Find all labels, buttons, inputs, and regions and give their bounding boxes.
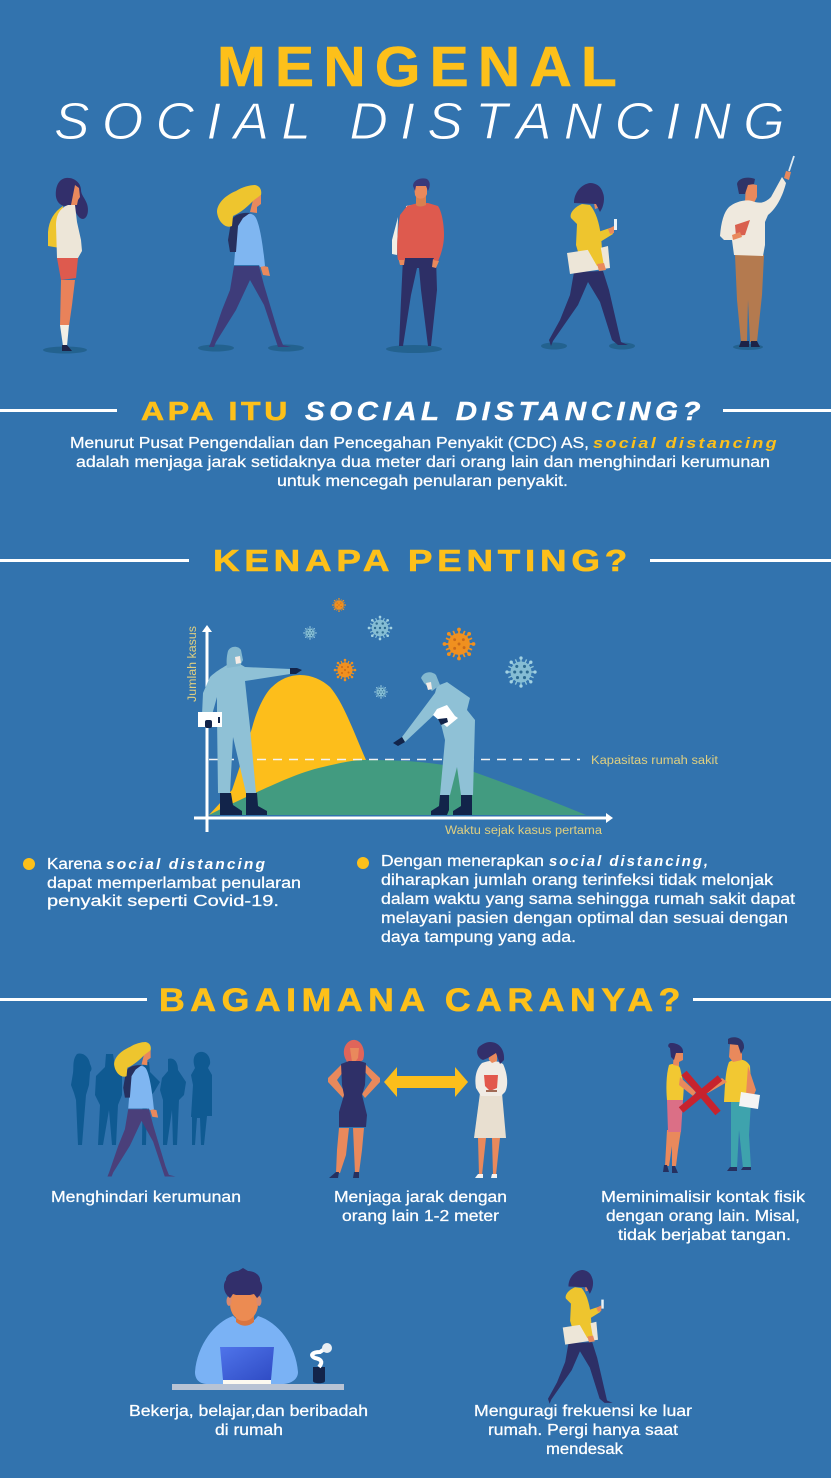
left bullet point: dapat memperlambat penularan bbox=[47, 875, 301, 892]
capacity label: Kapasitas rumah sakit bbox=[591, 755, 719, 767]
y-axis label: Jumlah kasus bbox=[187, 626, 199, 702]
definition text block bbox=[70, 435, 779, 490]
caption: Menjaga jarak dengan bbox=[334, 1189, 507, 1206]
person 4: woman with phone and paper bbox=[541, 183, 635, 350]
icon: red cross bbox=[681, 1073, 720, 1113]
way 3: minimize physical contact bbox=[601, 1037, 805, 1244]
icon: coffee cup with steam bbox=[312, 1343, 332, 1383]
left bullet point: Karena bbox=[47, 856, 102, 873]
person 3: man in red sweater bbox=[386, 178, 444, 353]
right bullet point: Dengan menerapkan bbox=[381, 853, 544, 870]
caption: tidak berjabat tangan. bbox=[618, 1227, 791, 1244]
section heading: bagaimana caranya bbox=[0, 982, 831, 1018]
doctor pointing at peak bbox=[198, 647, 302, 815]
caption: rumah. Pergi hanya saat bbox=[488, 1422, 679, 1439]
icon: person at laptop bbox=[195, 1268, 298, 1384]
right bullet point bbox=[357, 853, 796, 946]
caption: Bekerja, belajar,dan beribadah bbox=[129, 1403, 368, 1420]
chart axes bbox=[194, 625, 613, 832]
way 2: keep distance bbox=[328, 1040, 507, 1225]
green flattened curve bbox=[209, 760, 586, 815]
section heading: apa itu social distancing: SOCIAL DISTANCING? bbox=[305, 396, 705, 426]
title: SOCIAL DISTANCING bbox=[54, 93, 797, 151]
way 4: work from home bbox=[129, 1268, 368, 1439]
person 1: woman with backpack bbox=[43, 178, 88, 354]
icon: woman in cream dress bbox=[474, 1042, 507, 1178]
person 5: man pointing upward bbox=[720, 156, 794, 350]
icon: walking woman with paper bbox=[548, 1270, 613, 1404]
right bullet point: diharapkan jumlah orang terinfeksi tidak melonjak bbox=[381, 872, 773, 889]
section heading: apa itu social distancing bbox=[0, 396, 831, 426]
left bullet point: penyakit seperti Covid-19. bbox=[47, 893, 279, 910]
caption: Menghindari kerumunan bbox=[51, 1189, 241, 1206]
caption: dengan orang lain. Misal, bbox=[606, 1208, 800, 1225]
caption: orang lain 1-2 meter bbox=[342, 1208, 499, 1225]
left bullet point bbox=[23, 856, 301, 910]
x-axis label: Waktu sejak kasus pertama bbox=[445, 825, 603, 837]
way 1: avoid crowds bbox=[51, 1042, 241, 1206]
viruses bbox=[303, 598, 537, 699]
left bullet point: social distancing bbox=[106, 856, 267, 873]
caption: di rumah bbox=[215, 1422, 283, 1439]
title bbox=[54, 35, 797, 151]
definition text block: adalah menjaga jarak setidaknya dua meter dari orang lain dan menghindari kerumunan bbox=[76, 454, 770, 471]
people illustration row bbox=[43, 156, 794, 354]
section heading: kenapa penting: KENAPA PENTING? bbox=[213, 543, 632, 578]
right bullet point: dalam waktu yang sama sehingga rumah sakit dapat bbox=[381, 891, 796, 908]
icon: woman and man with crossed handshake bbox=[663, 1037, 760, 1173]
definition text block: social distancing bbox=[593, 435, 779, 452]
right bullet point: daya tampung yang ada. bbox=[381, 929, 576, 946]
section heading: bagaimana caranya: BAGAIMANA CARANYA? bbox=[159, 982, 686, 1018]
caption: mendesak bbox=[546, 1441, 623, 1458]
person 2: blonde woman walking bbox=[198, 185, 304, 352]
definition text block: Menurut Pusat Pengendalian dan Pencegahan Penyakit (CDC) AS, bbox=[70, 435, 589, 452]
title: MENGENAL bbox=[217, 35, 626, 99]
icon: walking blonde woman bbox=[107, 1042, 176, 1177]
caption: Meminimalisir kontak fisik bbox=[601, 1189, 805, 1206]
icon: double arrow bbox=[384, 1067, 468, 1097]
right bullet point: social distancing, bbox=[549, 853, 710, 870]
right bullet point: melayani pasien dengan optimal dan sesuai dengan bbox=[381, 910, 788, 927]
section heading: kenapa penting bbox=[0, 543, 831, 578]
hospital capacity dashed line bbox=[209, 758, 580, 760]
icon: crowd silhouettes bbox=[71, 1052, 212, 1145]
flatten-the-curve chart bbox=[187, 598, 719, 837]
icon: woman in navy dress bbox=[328, 1040, 380, 1178]
doctor inspecting curve bbox=[393, 672, 475, 815]
caption bbox=[334, 1189, 507, 1225]
caption bbox=[129, 1403, 368, 1439]
caption bbox=[474, 1403, 692, 1458]
section heading: apa itu social distancing: APA ITU bbox=[141, 396, 291, 426]
definition text block: untuk mencegah penularan penyakit. bbox=[277, 473, 568, 490]
way 5: reduce going out bbox=[474, 1270, 692, 1458]
caption bbox=[601, 1189, 805, 1244]
caption: Menguragi frekuensi ke luar bbox=[474, 1403, 692, 1420]
icon: table bbox=[172, 1384, 344, 1390]
yellow unmitigated curve bbox=[209, 675, 366, 815]
